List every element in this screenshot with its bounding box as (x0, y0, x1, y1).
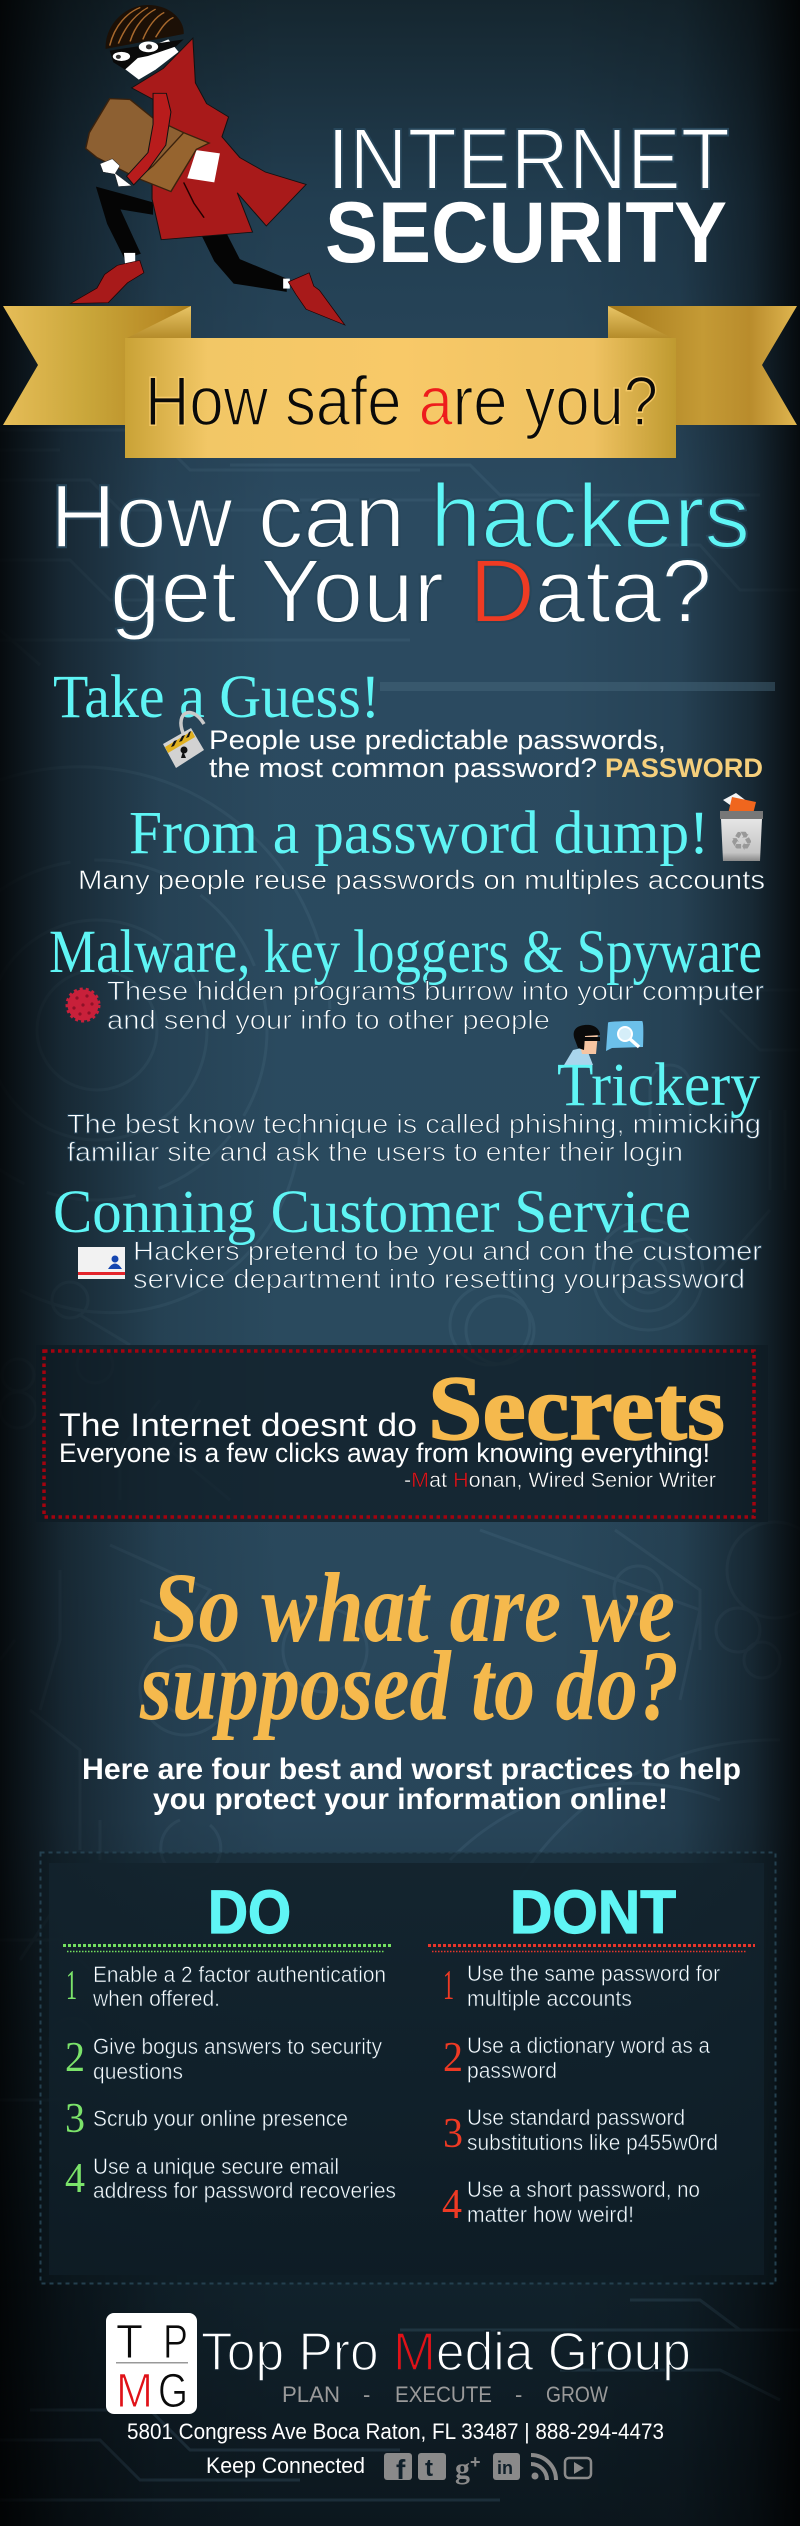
quote line two: Everyone is a few clicks away from knowing everything! (59, 1438, 710, 1468)
panel dashed frame (40, 1852, 776, 2284)
item 2: password (467, 2058, 557, 2083)
icon: beanie (106, 5, 184, 49)
icon: red virus (67, 989, 99, 1021)
section: Conning Customer Service: service department into resetting yourpassword (133, 1264, 745, 1294)
item 4: Use a unique secure email (93, 2154, 339, 2179)
body text: People use predictable passwords, (209, 725, 666, 755)
item 2 (443, 2033, 711, 2083)
icon: rss (531, 2455, 556, 2480)
item 1: Use the same password for (467, 1961, 720, 1986)
section: Trickery: familiar site and ask the users to enter their login (67, 1137, 683, 1167)
green dotted rule (63, 1946, 392, 1952)
icon: search speech bubble (606, 1021, 643, 1051)
icon: google plus: + (470, 2452, 481, 2472)
icon: recycle bin (720, 793, 763, 861)
tagline: PLAN (282, 2382, 340, 2407)
section: Take a Guess (53, 664, 763, 783)
item 2: questions (93, 2059, 183, 2084)
icon: paper in pocket (187, 150, 220, 182)
icon: twitter (418, 2453, 446, 2482)
tagline: GROW (546, 2382, 608, 2407)
item 4: 4 (65, 2156, 85, 2202)
icon: linkedin (493, 2453, 520, 2480)
item 3: Use standard password (467, 2105, 685, 2130)
quote text: The Internet doesnt do (59, 1407, 417, 1443)
item 4 (65, 2154, 396, 2203)
icon: arm (127, 93, 171, 185)
illustration: masked thief carrying a briefcase (70, 5, 345, 325)
quote background (36, 1345, 768, 1522)
icon: ID card (78, 1247, 125, 1279)
footer: company logo (106, 2313, 691, 2418)
item 3: Scrub your online presence (93, 2106, 348, 2131)
item 3: 3 (443, 2111, 463, 2157)
item 3: 3 (65, 2096, 85, 2142)
heading: Trickery (557, 1052, 760, 1119)
item 1 (443, 1961, 720, 2011)
body text: Many people reuse passwords on multiples accounts (78, 865, 765, 895)
icon: briefcase (86, 99, 209, 192)
icon: face and mask (110, 39, 184, 80)
intro text: you protect your information online! (153, 1783, 668, 1816)
heading: So what are we supposed to do: supposed to do? (139, 1630, 679, 1741)
icon: google plus (455, 2452, 481, 2485)
title: Internet Security: INTERNET (327, 111, 730, 208)
tagline: EXECUTE (395, 2382, 492, 2407)
footer: address and phone: 5801 Congress Ave Boca Raton, FL 33487 | 888-294-4473 (127, 2419, 664, 2444)
icon: facebook (384, 2453, 412, 2485)
item 4: address for password recoveries (93, 2178, 396, 2203)
ribbon right tail (608, 306, 797, 425)
panel: quote on secrets (36, 1345, 768, 1522)
intro text: Here are four best and worst practices to help (82, 1753, 741, 1786)
divider bar (380, 682, 775, 691)
item 2: Give bogus answers to security (93, 2034, 382, 2059)
ribbon center band (125, 338, 676, 458)
logo badge TPMG: G (158, 2365, 188, 2418)
item 3: substitutions like p455w0rd (467, 2130, 718, 2155)
item 3 (65, 2096, 348, 2142)
item 1: Enable a 2 factor authentication (93, 1962, 386, 1987)
icon: masked hacker (564, 1025, 600, 1065)
body text: These hidden programs burrow into your computer (107, 976, 764, 1006)
icon: video play (565, 2458, 591, 2478)
title: Internet Security: SECURITY (325, 185, 727, 281)
item 1: when offered. (92, 1986, 220, 2011)
item 4: matter how weird! (467, 2202, 634, 2227)
heading: DO (208, 1878, 291, 1946)
section: Trickery (67, 1021, 761, 1167)
heading: How can hackers get Your Data: How can hackers (50, 467, 750, 567)
item 1: multiple accounts (467, 1986, 632, 2011)
banner text: How safe are you? (145, 362, 658, 440)
heading: So what are we supposed to do (139, 1552, 679, 1741)
tagline: - (515, 2382, 522, 2407)
icon: open padlock (163, 712, 204, 768)
heading: DONT (510, 1878, 676, 1946)
item 1: 1 (443, 1963, 454, 2009)
item 4: 4 (442, 2182, 462, 2228)
icon: hand (100, 159, 132, 187)
logo badge TPMG: T (116, 2316, 143, 2369)
icon: recycle bin: ♻ (730, 827, 753, 857)
item 4: Use a short password, no (467, 2177, 700, 2202)
column: DO (63, 1878, 396, 2203)
section: Malware, key loggers and Spyware (49, 919, 764, 1035)
heading: Take a Guess! (53, 664, 380, 731)
icon: facebook: f (396, 2454, 406, 2485)
icon: twitter: t (425, 2455, 433, 2482)
red dotted border (44, 1351, 754, 1517)
footer: keep connected: Keep Connected (206, 2453, 365, 2478)
item 2: Use a dictionary word as a (467, 2033, 711, 2058)
title: Internet Security (325, 111, 730, 281)
red dotted rule (428, 1946, 755, 1952)
logo badge TPMG (106, 2313, 197, 2418)
column: DONT (428, 1878, 755, 2228)
banner ribbon: How safe are you (3, 306, 797, 458)
item 2: 2 (65, 2035, 85, 2081)
icon: thief legs (96, 187, 287, 292)
item 1 (66, 1962, 386, 2011)
panel: do and dont lists (40, 1852, 776, 2284)
panel fill (49, 1863, 764, 2275)
heading: How can hackers get Your Data (50, 467, 750, 642)
item 2: 2 (443, 2035, 463, 2081)
social media icons (384, 2452, 591, 2485)
body text: The best know technique is called phishing, mimicking (67, 1109, 761, 1139)
heading: From a password dump! (129, 800, 709, 867)
section: Malware, key loggers and Spyware: and send your info to other people (107, 1005, 550, 1035)
heading: How can hackers get Your Data: get Your Data? (110, 542, 712, 642)
highlight: PASSWORD: PASSWORD (605, 753, 763, 783)
tagline: - (363, 2382, 370, 2407)
heading: So what are we supposed to do: So what are we (152, 1552, 675, 1663)
intro text (82, 1753, 741, 1816)
icon: thief socks and shoes (70, 253, 345, 325)
icon: linkedin: in (497, 2458, 513, 2478)
attribution: -Mat Honan, Wired Senior Writer (404, 1469, 716, 1492)
body text: Hackers pretend to be you and con the customer (133, 1236, 762, 1266)
logo badge TPMG: M (116, 2365, 153, 2418)
heading: Conning Customer Service (53, 1179, 691, 1246)
icon: red coat (132, 38, 306, 240)
ribbon left tail (3, 306, 191, 425)
icon: coat seam (184, 182, 204, 218)
item 1: 1 (66, 1963, 77, 2009)
item 4 (442, 2177, 700, 2228)
logo badge TPMG: P (163, 2316, 188, 2369)
icon: google plus: g (455, 2452, 470, 2485)
company name: Top Pro Media Group (201, 2322, 691, 2382)
item 2 (65, 2034, 382, 2084)
highlight: Secrets: Secrets (428, 1357, 725, 1459)
section: Take a Guess: the most common password? (209, 753, 597, 783)
section: From a password dump (78, 793, 765, 895)
section: Conning Customer Service (53, 1179, 762, 1294)
item 3 (443, 2105, 718, 2157)
